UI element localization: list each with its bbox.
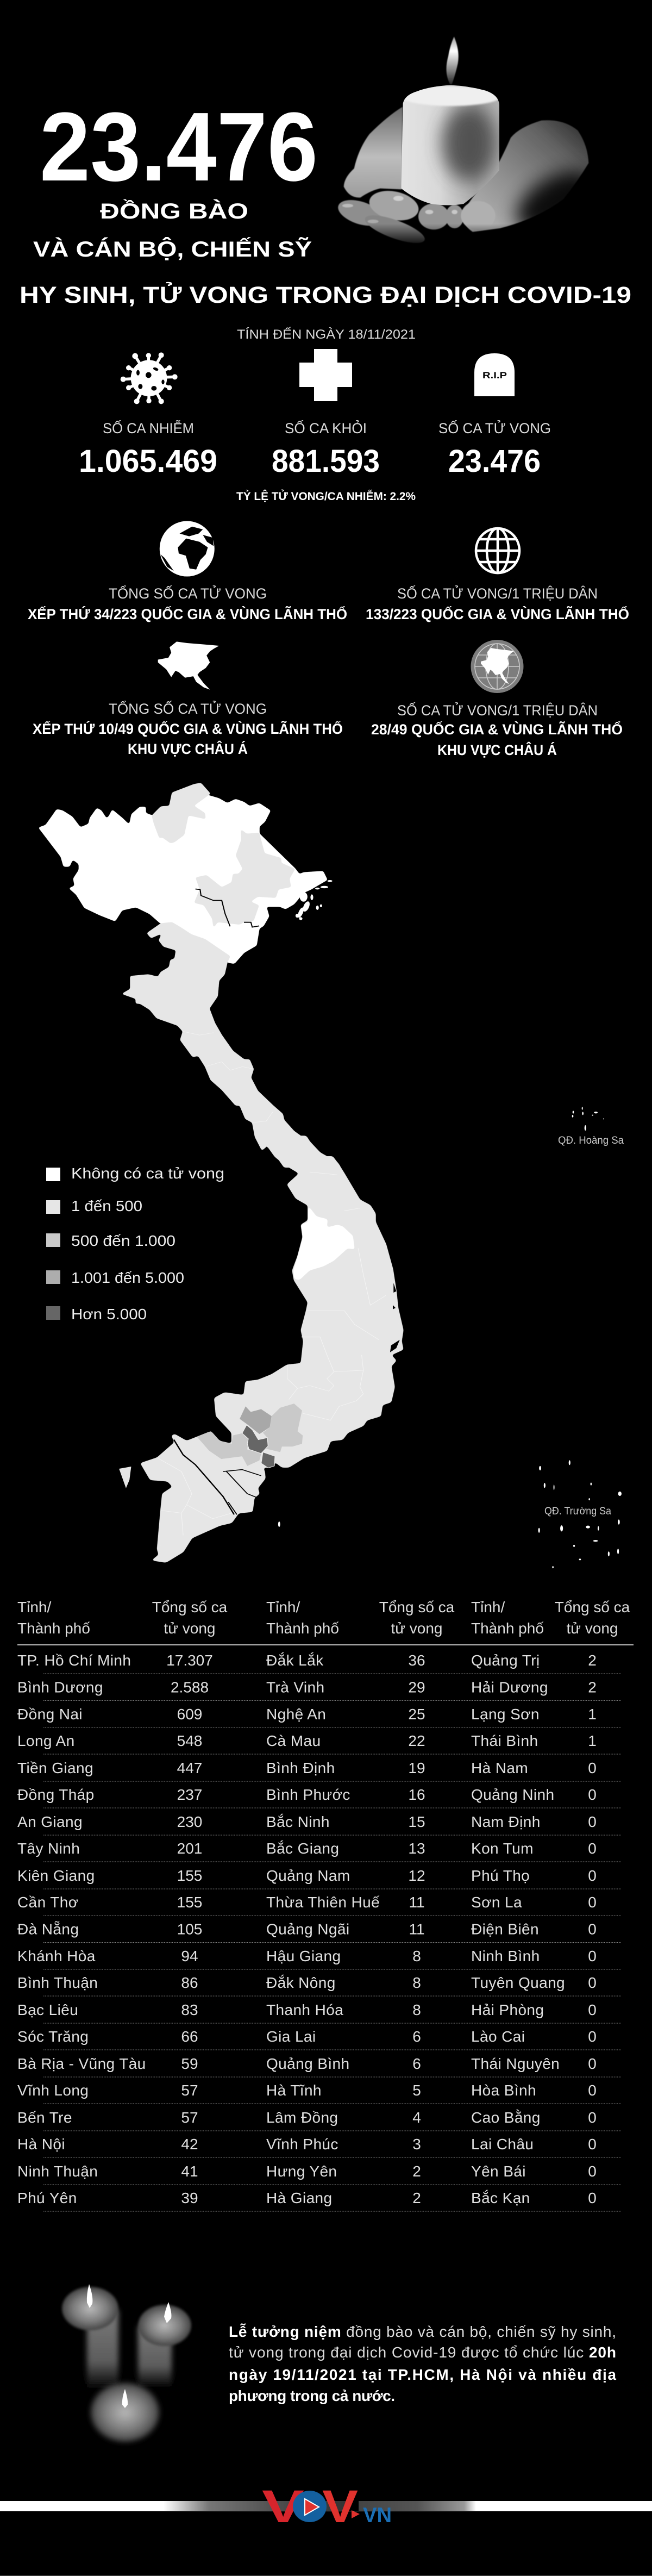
row 12: 0 [588, 1948, 597, 1964]
row 20: 0 [588, 2163, 597, 2180]
row 8: Kon Tum [471, 1840, 534, 1857]
map: southern provinces [119, 1136, 403, 1562]
memorial text: phương trong cả nước. [229, 2387, 395, 2404]
photo: three candles [62, 2284, 191, 2442]
fingers [335, 186, 496, 248]
row 5 [17, 1760, 597, 1776]
row 4: 1 [588, 1732, 597, 1749]
legend: over 5000: Hơn 5.000 [71, 1306, 147, 1323]
row 9: 155 [177, 1867, 202, 1884]
row 21: Phú Yên [17, 2190, 77, 2206]
row 21: Hà Giang [266, 2190, 333, 2206]
table header: tử vong [164, 1620, 216, 1637]
Mekong branches [174, 1439, 234, 1514]
text: world total rank [28, 584, 347, 622]
row 4: 548 [177, 1732, 202, 1749]
row 17: Vĩnh Long [17, 2082, 89, 2099]
row 10: Thừa Thiên Huế [266, 1894, 380, 1911]
table header: Tỉnh/ [17, 1599, 51, 1616]
text: asia per million rank: SỐ CA TỬ VONG/1 TRIỆU DÂN [397, 701, 598, 719]
label: so ca tu vong: SỐ CA TỬ VONG [438, 419, 551, 436]
row 15: 6 [412, 2028, 421, 2045]
row 14: Bạc Liêu [17, 2001, 78, 2018]
row 17: 5 [412, 2082, 421, 2099]
row 9: 0 [588, 1867, 597, 1884]
right hand shadow [506, 159, 605, 244]
row 2: Hải Dương [471, 1679, 548, 1696]
text: world per million rank: SỐ CA TỬ VONG/1 TRIỆU DÂN [397, 584, 598, 602]
north central gray area [122, 922, 341, 1168]
row 18: Cao Bằng [471, 2109, 541, 2126]
text: asia total rank [33, 700, 343, 757]
row 13 [17, 1974, 597, 1991]
row 15: 0 [588, 2028, 597, 2045]
row 7: An Giang [17, 1813, 83, 1830]
candle top highlight [400, 86, 501, 106]
row 17: Hà Tĩnh [266, 2082, 322, 2099]
row 15: Sóc Trăng [17, 2028, 89, 2045]
row 20: Hưng Yên [266, 2163, 337, 2180]
row 1: Quảng Trị [471, 1652, 540, 1669]
row 8: 0 [588, 1840, 597, 1857]
title line: hy sinh: HY SINH, TỬ VONG TRONG ĐẠI DỊCH COVID-19 [20, 282, 631, 308]
title line: dong bao: ĐỒNG BÀO [100, 198, 248, 223]
row 6: Đồng Tháp [17, 1786, 95, 1803]
logo: play circle [293, 2491, 327, 2522]
text: asia total rank: TỔNG SỐ CA TỬ VONG [109, 700, 267, 717]
row 20 [17, 2163, 597, 2180]
row 3: 1 [588, 1706, 597, 1723]
table header: Thành phố [266, 1620, 339, 1637]
row 9: Quảng Nam [266, 1867, 350, 1884]
legend: no deaths: Không có ca tử vong [71, 1165, 224, 1182]
table header: Tỉnh/ [471, 1599, 505, 1616]
row 2: 2.588 [171, 1679, 209, 1696]
row 16: Bà Rịa - Vũng Tàu [17, 2055, 146, 2072]
value: so ca nhiem: 1.065.469 [79, 444, 217, 479]
row 16 [17, 2055, 597, 2072]
row 21: 0 [588, 2190, 597, 2206]
row 13: 8 [412, 1974, 421, 1991]
row 20: 41 [181, 2163, 198, 2180]
row 5: 447 [177, 1760, 202, 1776]
row 5: Hà Nam [471, 1760, 528, 1776]
row 21: Bắc Kạn [471, 2190, 530, 2206]
row 6 [17, 1786, 597, 1803]
row 10 [17, 1894, 597, 1911]
row 19: 3 [412, 2136, 421, 2153]
row 21 [17, 2190, 597, 2206]
row 7: 0 [588, 1813, 597, 1830]
row 3: 609 [177, 1706, 202, 1723]
text: asia per million rank: KHU VỰC CHÂU Á [437, 741, 557, 758]
south gray area [141, 1136, 403, 1562]
row 2: Trà Vinh [266, 1679, 324, 1696]
row 6: 16 [408, 1786, 425, 1803]
row 3: 25 [408, 1706, 425, 1723]
row 19: 0 [588, 2136, 597, 2153]
row 14: 8 [412, 2001, 421, 2018]
row 13: 0 [588, 1974, 597, 1991]
table header: Tổng số ca [555, 1599, 630, 1616]
row 8: Tây Ninh [17, 1840, 80, 1857]
row 12 [17, 1948, 597, 1964]
row 1: 36 [408, 1652, 425, 1669]
row 14 [17, 2001, 597, 2018]
row 2: Bình Dương [17, 1679, 103, 1696]
row 21: 2 [412, 2190, 421, 2206]
row 3: Lạng Sơn [471, 1706, 540, 1723]
legend: 500 to 1000: 500 đến 1.000 [71, 1232, 175, 1249]
Long An [197, 1431, 261, 1466]
row 8: Bắc Giang [266, 1840, 339, 1857]
map: northern provinces [39, 783, 341, 1168]
row 9: 12 [408, 1867, 425, 1884]
candle left [62, 2284, 118, 2389]
Phu Quoc [119, 1467, 131, 1488]
row 19: Hà Nội [17, 2136, 65, 2153]
candle central shadow [442, 105, 496, 181]
row 16: Thái Nguyên [471, 2055, 560, 2072]
logo: VOV.VN: V [322, 2481, 358, 2532]
row 12: Hậu Giang [266, 1948, 341, 1964]
north-east and delta gray area [194, 829, 295, 928]
row 19: 42 [181, 2136, 198, 2153]
row 18 [17, 2109, 597, 2126]
row 15: 66 [181, 2028, 198, 2045]
Truong Sa islands [538, 1460, 622, 1568]
Binh Duong [242, 1425, 268, 1454]
row 18: Bến Tre [17, 2109, 72, 2126]
map of Vietnam [39, 783, 624, 1568]
row 12: 94 [181, 1948, 198, 1964]
logo: VOV.VN: VN [363, 2504, 392, 2527]
row 4: Thái Bình [471, 1732, 538, 1749]
table header: Tổng số ca [152, 1599, 228, 1616]
row 3 [17, 1706, 597, 1723]
table header [17, 1599, 630, 1637]
row 13: 86 [181, 1974, 198, 1991]
text: world total rank: XẾP THỨ 34/223 QUỐC GIA & VÙNG LÃNH THỔ [28, 605, 347, 622]
row 14: 0 [588, 2001, 597, 2018]
fatality rate: TỶ LỆ TỬ VONG/CA NHIỄM: 2.2% [236, 490, 416, 503]
row 5: Tiền Giang [17, 1760, 93, 1776]
row 1: Đắk Lắk [266, 1652, 324, 1669]
row 8: 201 [177, 1840, 202, 1857]
row 7 [17, 1813, 597, 1830]
northern rivers [196, 889, 259, 927]
row 2: 29 [408, 1679, 425, 1696]
text: world per million rank: 133/223 QUỐC GIA & VÙNG LÃNH THỔ [366, 605, 629, 622]
text: world per million rank [366, 584, 629, 622]
row 9: Kiên Giang [17, 1867, 95, 1884]
date line: TÍNH ĐẾN NGÀY 18/11/2021 [237, 327, 416, 342]
icon: asia map [158, 641, 219, 690]
Ho Chi Minh City [261, 1452, 275, 1468]
northern no-death area [39, 795, 327, 964]
text: asia per million rank [371, 701, 623, 758]
row 13: Bình Thuận [17, 1974, 98, 1991]
row 17: Hòa Bình [471, 2082, 536, 2099]
row 7: 15 [408, 1813, 425, 1830]
table header: Thành phố [471, 1620, 544, 1637]
Quang Ninh islands [296, 880, 333, 920]
row 15: Gia Lai [266, 2028, 316, 2045]
row 16: 59 [181, 2055, 198, 2072]
table of deaths by province [17, 1599, 634, 2211]
row 6: Quảng Ninh [471, 1786, 554, 1803]
row 21: 39 [181, 2190, 198, 2206]
row 17 [17, 2082, 597, 2099]
memorial text: Lễ tưởng niệm đồng bào và cán bộ, chiến sỹ hy sinh, [229, 2323, 616, 2340]
row 16: 0 [588, 2055, 597, 2072]
icon: earth globe [160, 521, 215, 577]
row 8 [17, 1840, 597, 1857]
row 10: 155 [177, 1894, 202, 1911]
value: so ca tu vong: 23.476 [448, 444, 541, 479]
row 13: Đắk Nông [266, 1974, 336, 1991]
row 1: 17.307 [166, 1652, 213, 1669]
label: so ca khoi: SỐ CA KHỎI [285, 419, 367, 436]
row 11: Điện Biên [471, 1921, 539, 1937]
row 10: 0 [588, 1894, 597, 1911]
label: so ca nhiem: SỐ CA NHIỄM [103, 419, 194, 436]
icon: tombstone R.I.P: R.I.P [482, 370, 507, 381]
row 19: Vĩnh Phúc [266, 2136, 338, 2153]
candle front [91, 2383, 159, 2442]
row 3: Nghệ An [266, 1706, 326, 1723]
title: big number: 23.476 [40, 92, 318, 202]
legend: 1 to 500: 1 đến 500 [71, 1197, 142, 1214]
label: Hoang Sa: QĐ. Hoàng Sa [558, 1135, 624, 1146]
row 16: Quảng Bình [266, 2055, 349, 2072]
row 5: 19 [408, 1760, 425, 1776]
row 14: 83 [181, 2001, 198, 2018]
row 15: Lào Cai [471, 2028, 525, 2045]
province borders [157, 1172, 386, 1535]
row 7: 230 [177, 1813, 202, 1830]
candle right [138, 2302, 191, 2387]
coast notches [390, 1283, 400, 1352]
label: Truong Sa: QĐ. Trường Sa [544, 1506, 611, 1517]
row 4 [17, 1732, 597, 1749]
row 4: 22 [408, 1732, 425, 1749]
Kon Tum no-death area [293, 1205, 355, 1280]
memorial text: tử vong trong đại dịch Covid-19 được tổ chức lúc 20h [229, 2344, 616, 2361]
Dong Nai [263, 1404, 303, 1452]
row 11: 105 [177, 1921, 202, 1937]
memorial text: ngày 19/11/2021 tại TP.HCM, Hà Nội và nhiều địa [229, 2366, 616, 2383]
table header: Tổng số ca [379, 1599, 455, 1616]
row 2 [17, 1679, 597, 1696]
photo: hands holding a candle [335, 36, 609, 248]
row 14: Hải Phòng [471, 2001, 544, 2018]
icon: medical cross [299, 349, 352, 401]
row 4: Long An [17, 1732, 75, 1749]
row 4: Cà Mau [266, 1732, 321, 1749]
row 11: 0 [588, 1921, 597, 1937]
footer bar [0, 2501, 652, 2511]
row 11: 11 [409, 1921, 425, 1937]
row 12: Ninh Bình [471, 1948, 540, 1964]
row 17: 57 [181, 2082, 198, 2099]
row 19 [17, 2136, 597, 2153]
islands [278, 1521, 280, 1527]
row 19: Lai Châu [471, 2136, 534, 2153]
row 18: 57 [181, 2109, 198, 2126]
row 20: 2 [412, 2163, 421, 2180]
row 12: 8 [412, 1948, 421, 1964]
right hand [463, 120, 588, 232]
row 5: 0 [588, 1760, 597, 1776]
row 9: Phú Thọ [471, 1867, 530, 1884]
row 11: Đà Nẵng [17, 1921, 79, 1937]
left hand thumb [344, 107, 403, 197]
row 12: Khánh Hòa [17, 1948, 96, 1964]
row 2: 2 [588, 1679, 597, 1696]
table header: Tỉnh/ [266, 1599, 300, 1616]
row 20: Ninh Thuận [17, 2163, 98, 2180]
row 14: Thanh Hóa [266, 2001, 343, 2018]
legend: 1001 to 5000: 1.001 đến 5.000 [71, 1269, 184, 1286]
row 1 [17, 1652, 597, 1669]
row 10: 11 [409, 1894, 425, 1911]
memorial text [229, 2323, 616, 2404]
flame [447, 36, 459, 84]
text: world total rank: TỔNG SỐ CA TỬ VONG [109, 584, 267, 602]
row 11: Quảng Ngãi [266, 1921, 349, 1937]
text: asia total rank: XẾP THỨ 10/49 QUỐC GIA & VÙNG LÃNH THỔ [33, 720, 343, 737]
text: asia per million rank: 28/49 QUỐC GIA & VÙNG LÃNH THỔ [371, 720, 623, 738]
icon: virus [121, 352, 178, 404]
row 18: 4 [412, 2109, 421, 2126]
logo: VOV.VN: V [262, 2481, 304, 2532]
table header: Thành phố [17, 1620, 90, 1637]
table header: tử vong [566, 1620, 618, 1637]
bottom shadow [337, 224, 609, 247]
row 8: 13 [408, 1840, 425, 1857]
Ha Giang gray area [152, 783, 211, 844]
icon: tombstone R.I.P [474, 353, 515, 396]
text: asia total rank: KHU VỰC CHÂU Á [128, 740, 248, 757]
row 1: 2 [588, 1652, 597, 1669]
Tay Ninh [240, 1406, 272, 1434]
title line: va can bo, chien sy: VÀ CÁN BỘ, CHIẾN SỸ [33, 236, 312, 261]
row 6: 237 [177, 1786, 202, 1803]
row 7: Bắc Ninh [266, 1813, 330, 1830]
icon: asia globe [471, 640, 524, 693]
row 1: TP. Hồ Chí Minh [17, 1652, 131, 1669]
row 15 [17, 2028, 597, 2045]
row 11 [17, 1921, 597, 1937]
logo: VOV.VN [262, 2481, 392, 2532]
row 6: 0 [588, 1786, 597, 1803]
candle body [398, 83, 501, 208]
row 3: Đồng Nai [17, 1706, 83, 1723]
row 6: Bình Phước [266, 1786, 350, 1803]
row 16: 6 [412, 2055, 421, 2072]
row 5: Bình Định [266, 1760, 335, 1776]
row 9 [17, 1867, 597, 1884]
row 10: Sơn La [471, 1894, 522, 1911]
row 18: 0 [588, 2109, 597, 2126]
map legend [46, 1165, 224, 1323]
row 10: Cần Thơ [17, 1894, 78, 1911]
row 17: 0 [588, 2082, 597, 2099]
row 7: Nam Định [471, 1813, 541, 1830]
row 20: Yên Bái [471, 2163, 526, 2180]
Hoang Sa islands [572, 1107, 604, 1131]
row 13: Tuyên Quang [471, 1974, 565, 1991]
value: so ca khoi: 881.593 [272, 444, 380, 479]
icon: wire globe [476, 528, 519, 573]
row 18: Lâm Đồng [266, 2109, 338, 2126]
table header: tử vong [391, 1620, 443, 1637]
